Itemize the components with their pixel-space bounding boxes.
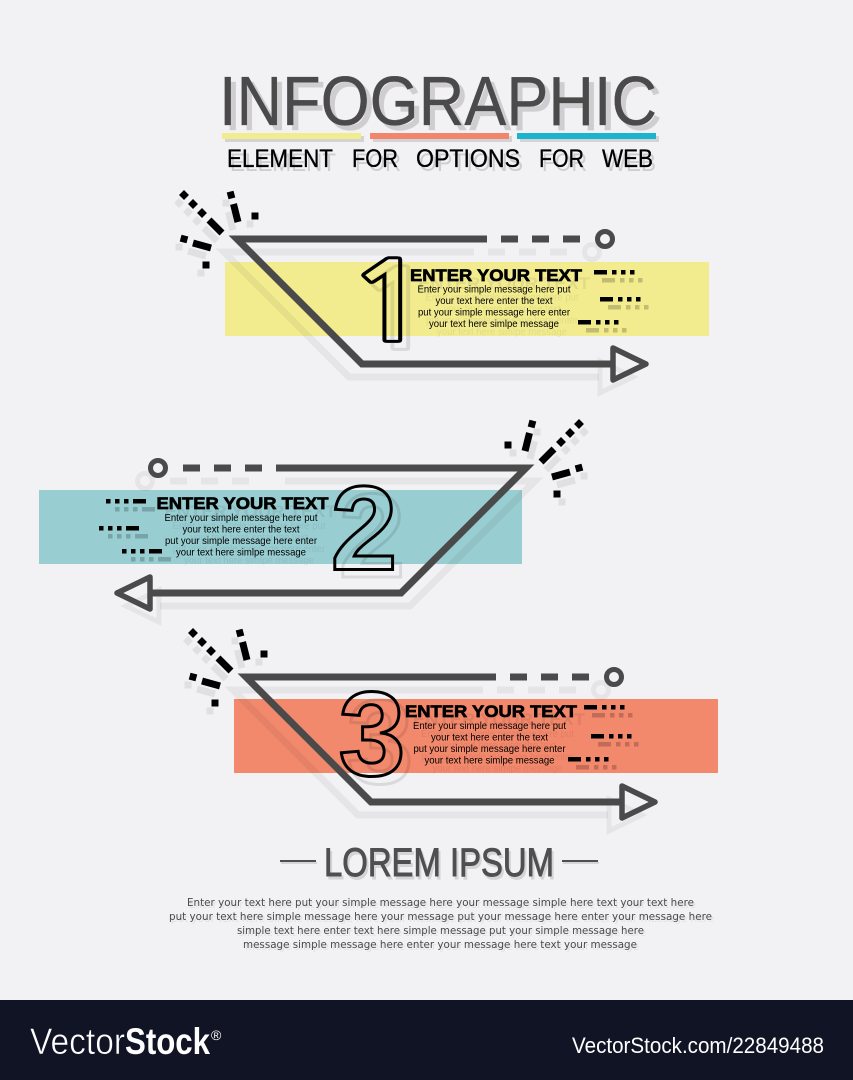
burst shadow: [510, 427, 589, 506]
text block 1: your text here simlpe message: [429, 318, 559, 330]
text block 3: put your simple message here enter: [414, 743, 566, 755]
text block 2: your text here enter the text: [190, 532, 308, 544]
connector arrow: [246, 670, 655, 818]
number 2: 2: [339, 469, 405, 603]
burst: [504, 419, 584, 498]
text block 1: Enter your simple message here put: [418, 284, 571, 296]
text block 3: Enter your simple message here put: [413, 720, 566, 732]
subtitle: WEB: [602, 145, 653, 173]
text block 3: put your simple message here enter: [422, 751, 574, 763]
text block 2: Enter your simple message here put: [172, 520, 326, 532]
closing paragraph: simple text here enter text here simple message put your simple message here: [239, 926, 646, 939]
teal band: [39, 490, 522, 564]
closing paragraph: put your text here simple message here your message put your message here enter your message here: [171, 912, 714, 925]
dash marks 2: [99, 499, 171, 562]
text block 1: Enter your simple message here put: [426, 292, 579, 304]
coral band: [234, 699, 718, 773]
text block 3: your text here enter the text: [439, 740, 556, 752]
footer logo: Vector: [30, 1021, 125, 1062]
burst shadow: [183, 636, 262, 714]
closing paragraph: message simple message here enter your message here text your message: [245, 940, 639, 953]
closing paragraph: [169, 896, 714, 953]
colour bars under title: [222, 133, 659, 142]
subtitle: OPTIONS: [416, 145, 520, 173]
text block 1: put your simple message here enter: [418, 306, 570, 318]
subtitle: FOR: [539, 145, 584, 173]
subtitle: [227, 145, 656, 177]
text block 1: ENTER YOUR TEXT: [418, 274, 591, 293]
text block 2: your text here simlpe message: [184, 554, 314, 566]
text block 2: put your simple message here enter: [173, 543, 325, 555]
dash marks 1: [578, 270, 648, 332]
yellow band: [225, 262, 709, 336]
text block 2: your text here enter the text: [182, 524, 300, 536]
text block 3: your text here enter the text: [431, 732, 548, 744]
footer id: VectorStock.com/22849488: [572, 1033, 824, 1058]
number 2: 2: [331, 462, 397, 596]
text block 3: ENTER YOUR TEXT: [405, 702, 578, 721]
subtitle: FOR: [355, 149, 401, 177]
panel: option 2: [39, 419, 589, 622]
subtitle: ELEMENT: [230, 149, 336, 177]
number 3: 3: [339, 667, 405, 801]
subtitle: OPTIONS: [419, 149, 523, 177]
text block 3: Enter your simple message here put: [421, 728, 574, 740]
number 3: 3: [347, 675, 413, 809]
subtitle: FOR: [352, 145, 398, 173]
closing paragraph: put your text here simple message here your message put your message here enter your message here: [169, 910, 712, 923]
closing paragraph: Enter your text here put your simple message here your message simple here text your text here: [189, 898, 696, 911]
text block 1: put your simple message here enter: [426, 314, 578, 326]
text block 1: your text here simlpe message: [437, 326, 567, 338]
text block 2: Enter your simple message here put: [164, 512, 318, 524]
subtitle: FOR: [542, 149, 587, 177]
title: INFOGRAPHIC: [219, 62, 657, 140]
heading: lorem ipsum: LOREM IPSUM: [324, 841, 554, 885]
dash marks 3: [568, 705, 638, 770]
burst shadow: [174, 198, 254, 276]
burst: [188, 628, 268, 706]
text block 1: [410, 266, 591, 338]
text block 1: your text here enter the text: [436, 295, 553, 307]
text block 2: your text here simlpe message: [176, 546, 306, 558]
subtitle: ELEMENT: [227, 145, 333, 173]
watermark footer: [0, 1000, 853, 1080]
closing paragraph: simple text here enter text here simple message put your simple message here: [237, 924, 644, 937]
title: INFOGRAPHIC: [224, 67, 662, 145]
text block 3: your text here simlpe message: [424, 754, 555, 766]
text block 3: [405, 702, 586, 774]
text block 2: put your simple message here enter: [165, 535, 317, 547]
heading: lorem ipsum: LOREM IPSUM: [326, 844, 556, 888]
text block 1: ENTER YOUR TEXT: [410, 266, 583, 285]
number 1: 1: [352, 258, 442, 366]
connector arrow: [237, 232, 646, 380]
closing paragraph: message simple message here enter your message here text your message: [243, 938, 637, 951]
text block 2: [156, 494, 337, 566]
footer logo bold: Stock: [125, 1021, 210, 1062]
text block 2: ENTER YOUR TEXT: [164, 502, 337, 521]
number 1: 1: [344, 250, 434, 358]
text block 2: ENTER YOUR TEXT: [156, 494, 329, 513]
connector arrow: [117, 460, 526, 609]
text block 3: ENTER YOUR TEXT: [413, 710, 586, 729]
arrow shadow: [224, 244, 633, 393]
subtitle: WEB: [605, 149, 656, 177]
registered mark: ®: [211, 1027, 222, 1043]
panel: option 1: [174, 190, 709, 393]
arrow shadow: [233, 682, 642, 831]
panel: option 3: [183, 628, 718, 831]
arrow shadow: [126, 474, 535, 622]
closing paragraph: Enter your text here put your simple message here your message simple here text your text here: [187, 896, 694, 909]
text block 3: your text here simlpe message: [432, 762, 563, 774]
burst: [179, 190, 258, 268]
text block 1: your text here enter the text: [444, 303, 561, 315]
